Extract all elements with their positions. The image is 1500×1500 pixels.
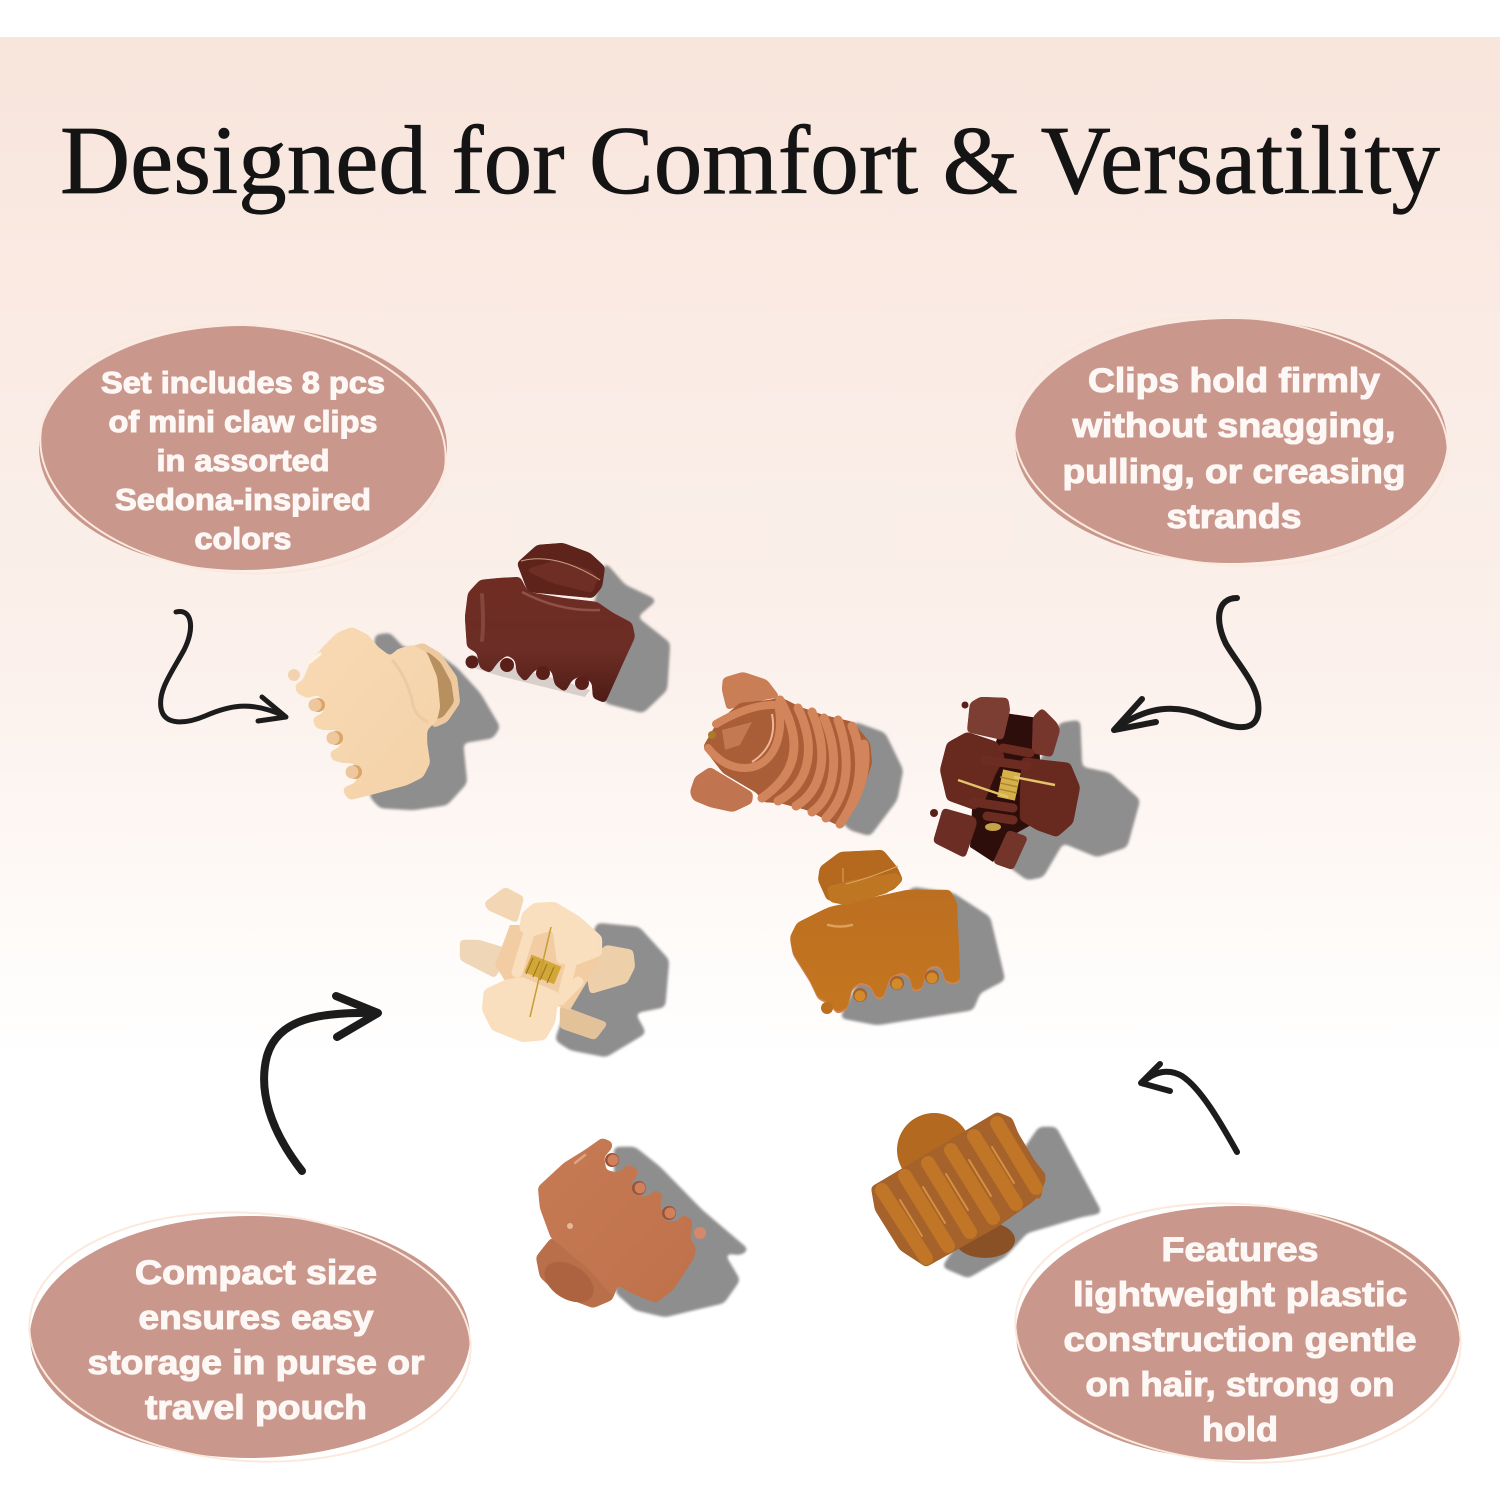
callout: clips hold firmly: without snagging, (1071, 407, 1396, 445)
arrow: top left (161, 611, 286, 722)
clip: coral closed (536, 1138, 749, 1317)
arrow: top right (1114, 598, 1258, 730)
callout: compact size: Compact size (135, 1254, 377, 1292)
callout: clips hold firmly: strands (1166, 498, 1302, 536)
callout: lightweight plastic: Features (1162, 1231, 1318, 1269)
arrow: bottom left (264, 996, 378, 1171)
callout: set includes 8 pcs: of mini claw clips (108, 405, 378, 439)
arrow: bottom right (1141, 1064, 1237, 1152)
title: Designed for Comfort & Versatility (60, 107, 1440, 215)
callout: clips hold firmly (1006, 302, 1456, 580)
callout: set includes 8 pcs: Sedona-inspired (115, 483, 371, 517)
callout: clips hold firmly: Clips hold firmly (1088, 362, 1380, 400)
callout: set includes 8 pcs: in assorted (156, 444, 330, 478)
callout: compact size (21, 1198, 479, 1476)
callout: lightweight plastic: on hair, strong on (1086, 1366, 1394, 1404)
callout: compact size: ensures easy (138, 1299, 374, 1337)
callout: set includes 8 pcs: colors (194, 522, 292, 556)
clip: amber closed (790, 850, 1005, 1025)
clip: amber ribbed (871, 1112, 1102, 1278)
clip: cream open with spring (460, 887, 669, 1057)
clip: cream closed (288, 627, 500, 810)
callout: lightweight plastic (1007, 1189, 1469, 1477)
callout: lightweight plastic: hold (1202, 1411, 1278, 1449)
callout: lightweight plastic: construction gentle (1064, 1321, 1416, 1359)
clip: chocolate open with spring (930, 697, 1140, 880)
callout: lightweight plastic: lightweight plastic (1073, 1276, 1407, 1314)
callout: compact size: travel pouch (145, 1389, 367, 1427)
clip: chocolate closed (465, 543, 670, 713)
clip: coral coiled (690, 672, 903, 836)
callout: clips hold firmly: pulling, or creasing (1062, 453, 1406, 491)
callout: compact size: storage in purse or (88, 1344, 424, 1382)
callout: set includes 8 pcs (32, 311, 454, 587)
callout: set includes 8 pcs: Set includes 8 pcs (101, 366, 385, 400)
